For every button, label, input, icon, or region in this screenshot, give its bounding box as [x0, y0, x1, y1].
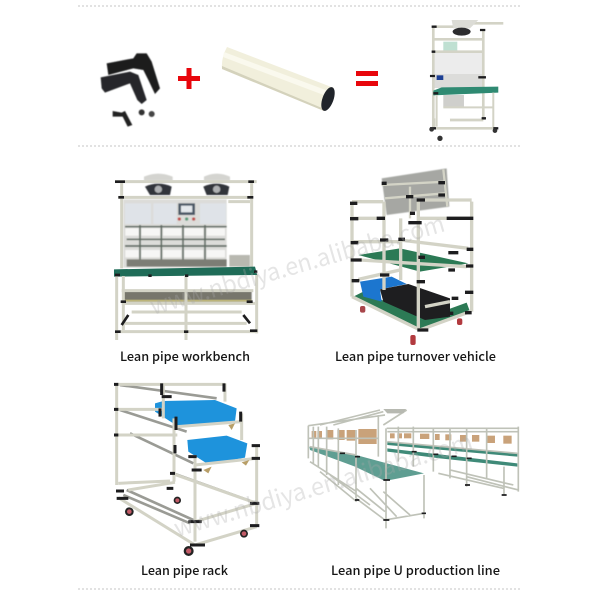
turnover vehicle photo: [350, 168, 473, 345]
caption: turnover vehicle: Lean pipe turnover vehicle: [335, 346, 496, 365]
watermark: [145, 204, 476, 544]
caption: U production line: Lean pipe U production line: [331, 560, 500, 579]
caption: rack: Lean pipe rack: [141, 560, 229, 579]
icon: equals sign: [356, 71, 378, 86]
icon: white lean pipe: [222, 47, 337, 113]
lean pipe rack photo: [114, 383, 260, 556]
small lean pipe workbench: [429, 20, 503, 141]
watermark: www.nbdiya.en.alibaba.com: [169, 422, 476, 544]
U production line photo: [308, 409, 518, 528]
workbench photo: [114, 174, 257, 340]
watermark: www.nbdiya.en.alibaba.com: [145, 204, 448, 322]
caption: workbench: Lean pipe workbench: [120, 346, 250, 365]
icon: black pipe connector joints and bolts: [101, 53, 160, 127]
icon: plus sign: [178, 68, 200, 89]
